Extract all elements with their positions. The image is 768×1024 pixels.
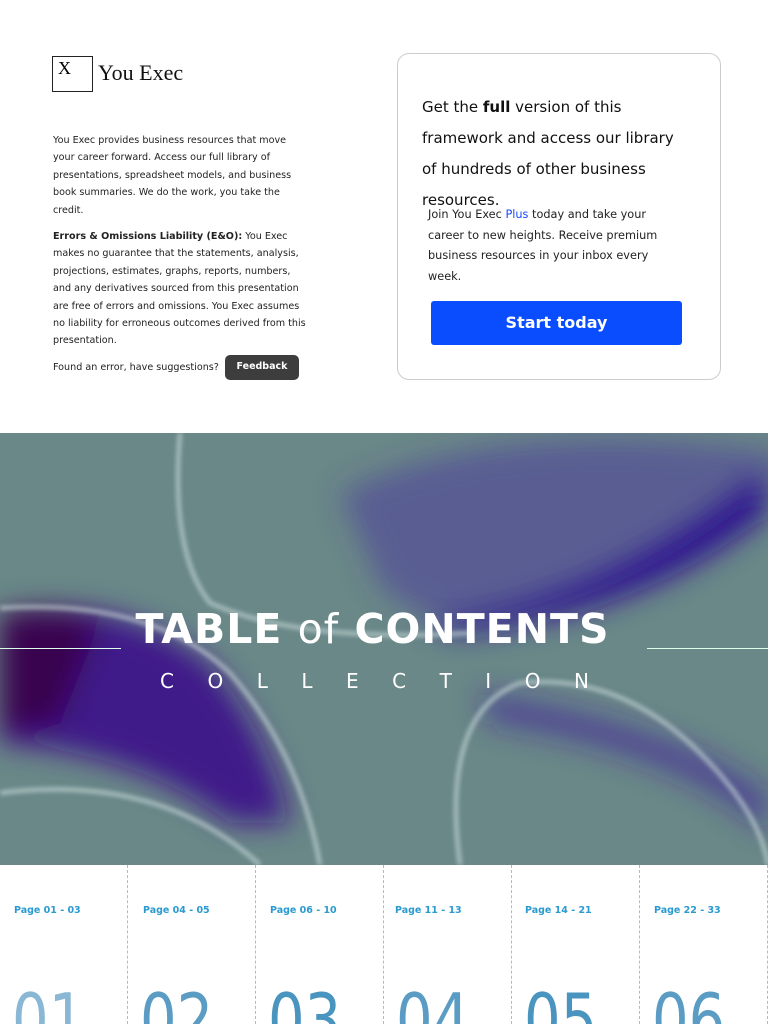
column 2 xyxy=(128,865,256,1024)
column 5: Page 14 - 21 xyxy=(525,905,592,916)
start button: Start today xyxy=(506,313,607,332)
column 3 xyxy=(256,865,384,1024)
column 5 xyxy=(512,865,640,1024)
card text: Join You Exec Plus today and take your career to new heights. Receive premium business resources in your inbox every week. xyxy=(428,208,657,282)
logo: You Exec xyxy=(98,60,183,85)
hero subtitle: COLLECTION xyxy=(160,669,622,693)
disclaimer text: Errors & Omissions Liability (E&O): You Exec makes no guarantee that the statements, analysis, projections, estimates, graphs, reports, numbers, and any derivatives sourced from this presentation are free of errors and omissions. You Exec assumes no liability for erroneous outcomes derived from this presentation. xyxy=(53,231,306,346)
left rule xyxy=(0,648,121,649)
column 3: Page 06 - 10 xyxy=(270,905,337,916)
right rule xyxy=(647,648,768,649)
hero banner xyxy=(0,433,768,865)
feedback button: Feedback xyxy=(237,361,287,372)
start button xyxy=(431,301,682,345)
intro text: You Exec provides business resources that move your career forward. Access our full library of presentations, spreadsheet models, and business book summaries. We do the work, you take the credit. xyxy=(53,135,291,216)
hero title: TABLE of CONTENTS xyxy=(135,605,610,653)
feedback button xyxy=(225,355,299,380)
column 4: Page 11 - 13 xyxy=(395,905,462,916)
contents columns xyxy=(12,865,768,1024)
logo: X xyxy=(58,58,71,78)
logo xyxy=(52,56,183,92)
column 1 xyxy=(0,865,128,1024)
panel: signup card xyxy=(397,53,721,380)
background art xyxy=(0,433,768,865)
feedback row: Found an error, have suggestions? xyxy=(53,362,219,373)
column 2: Page 04 - 05 xyxy=(143,905,210,916)
feedback row xyxy=(53,355,299,380)
card heading: Get the full version of this framework and access our library of hundreds of other business resources. xyxy=(422,98,674,209)
column 1: Page 01 - 03 xyxy=(14,905,81,916)
column 4 xyxy=(384,865,512,1024)
column 6 xyxy=(640,865,768,1024)
column 6: Page 22 - 33 xyxy=(654,905,721,916)
